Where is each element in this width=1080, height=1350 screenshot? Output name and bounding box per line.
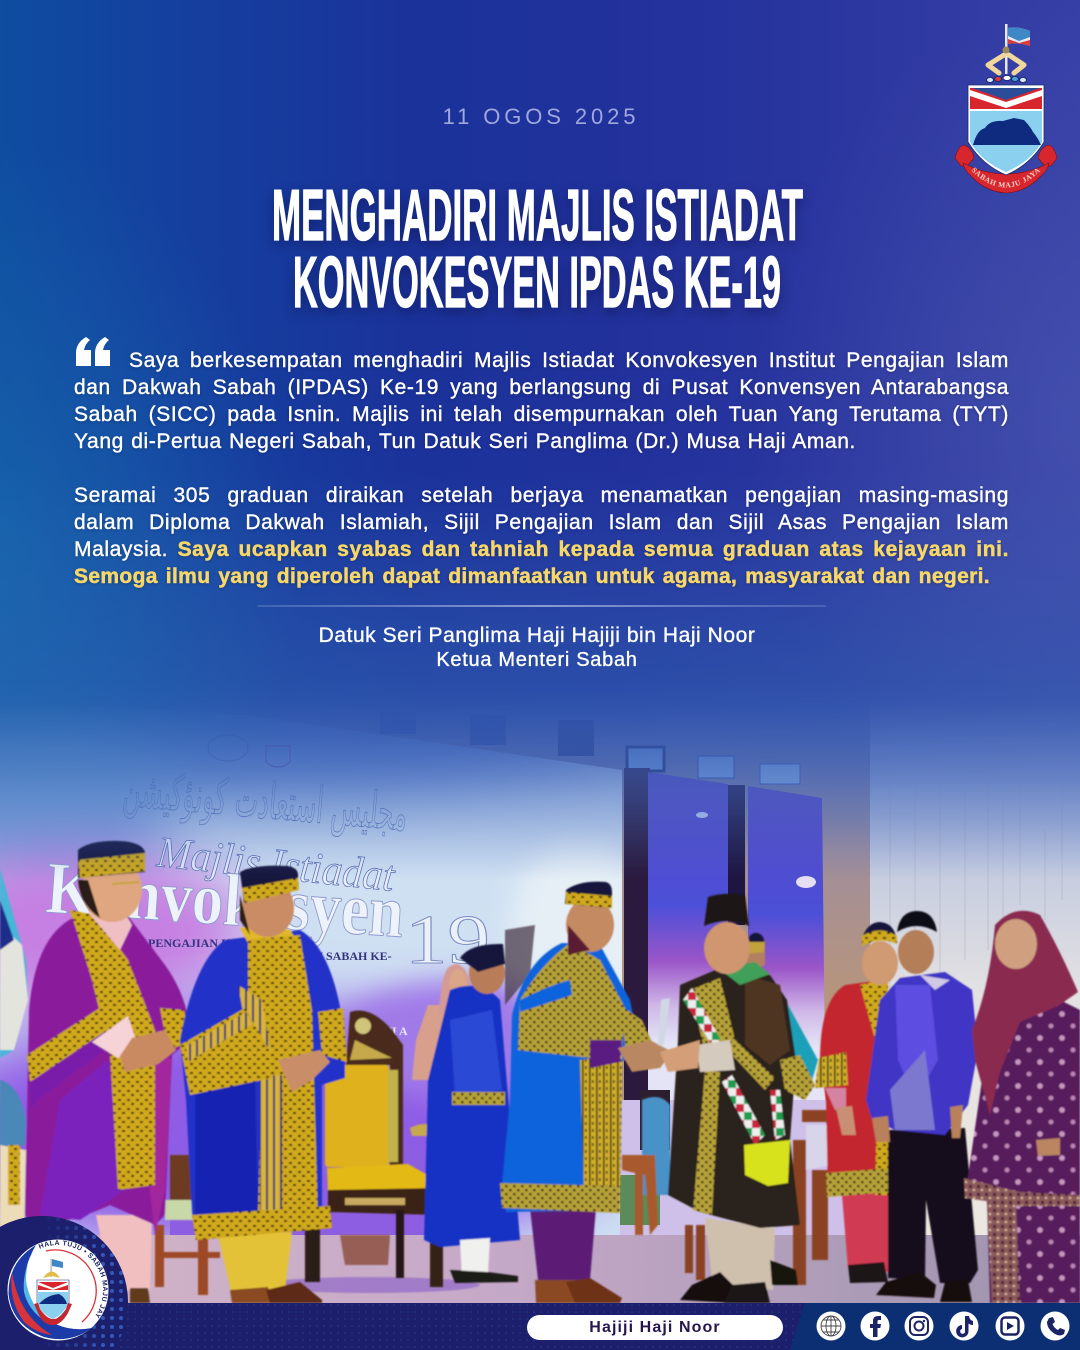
stage backdrop screen [0, 732, 622, 1235]
stage wall [378, 734, 870, 1100]
backdrop big title: Konvokesyen [44, 847, 407, 954]
quote text block: dalam Diploma Dakwah Islamiah, Sijil Pengajian Islam dan Sijil Asas Pengajian Islam [74, 511, 1009, 534]
icon: globe [816, 1312, 846, 1340]
icon: instagram [904, 1312, 934, 1340]
footer bar [114, 1303, 1080, 1350]
right slatted wall [870, 700, 1080, 1240]
stage backdrop screen: HAJI A [368, 1024, 408, 1038]
quote text block: Malaysia. Saya ucapkan syabas dan tahniah kepada semua graduan atas kejayaan ini. [74, 538, 1009, 561]
badge swoosh [8, 1245, 92, 1339]
flag [1005, 24, 1030, 74]
person 3: blue graduate from behind [424, 944, 520, 1283]
attribution: Ketua Menteri Sabah [436, 649, 638, 671]
attribution [319, 624, 755, 671]
badge: Hala Tuju Sabah Maju Jaya [0, 1216, 128, 1348]
crest: Sabah coat of arms [954, 24, 1058, 194]
guest in pink hijab [412, 964, 470, 1080]
quote text block: Semoga ilmu yang diperoleh dapat dimanfaatkan untuk agama, masyarakat dan negeri. [74, 565, 990, 588]
quote text block [74, 349, 1009, 590]
attribution: Datuk Seri Panglima Haji Hajiji bin Haji Noor [319, 624, 755, 647]
quote text block: Sabah (SICC) pada Isnin. Majlis ini telah disempurnakan oleh Tuan Yang Terutama (TYT) [74, 403, 1009, 426]
backdrop sub line: PENGAJIAN ISLAM [148, 936, 260, 950]
stage lights [470, 728, 800, 784]
photo: convocation ceremony on stage [0, 719, 1080, 1303]
icon: facebook [860, 1312, 890, 1340]
stage floor [96, 1235, 1080, 1303]
social pill: Hajiji Haji Noor [527, 1315, 783, 1340]
person 8: woman in maroon hijab [964, 911, 1080, 1303]
stage backdrop screen: AH SABAH KE- [305, 949, 392, 963]
icon: youtube play [996, 1312, 1024, 1340]
quote text block: Seramai 305 graduan diraikan setelah berjaya menamatkan pengajian masing-masing [74, 484, 1009, 507]
person 7: batik shirt [866, 911, 978, 1302]
wooden chairs behind graduates [685, 1110, 830, 1285]
small chair behind [155, 1155, 220, 1295]
dark columns [624, 768, 745, 1100]
ribbon motto: SABAH MAJU JAYA [972, 168, 1040, 188]
person 4: guest of honour [500, 882, 672, 1303]
date: 11 OGOS 2025 [443, 104, 639, 129]
quote text block: dan Dakwah Sabah (IPDAS) Ke-19 yang berlangsung di Pusat Konvensyen Antarabangsa [74, 376, 1009, 399]
person 6: red gown [815, 922, 908, 1283]
icon: phone [1040, 1312, 1070, 1340]
badge crest [34, 1259, 72, 1325]
quote text block: Saya berkesempatan menghadiri Majlis Istiadat Konvokesyen Institut Pengajian Islam [129, 349, 1009, 372]
stage backdrop screen: مجليس استعادت كونؤكيشن [121, 760, 410, 842]
left flag and seated guest [0, 868, 28, 1240]
backdrop emblems [208, 742, 290, 768]
person 5: graduate [658, 894, 818, 1303]
shield [968, 85, 1044, 175]
backdrop number: 19 [405, 902, 490, 979]
LED panels [648, 772, 826, 1100]
hanging trophy backdrop [505, 925, 535, 1005]
icon: tiktok [950, 1312, 978, 1340]
social pill: Hajiji Haji Noor: Hajiji Haji Noor [589, 1319, 721, 1336]
person 1: purple gown [25, 841, 190, 1303]
ribbon [955, 145, 1057, 193]
person 2: blue gown [180, 866, 347, 1303]
quote text block: Yang di-Pertua Negeri Sabah, Tun Datuk Seri Panglima (Dr.) Musa Haji Aman. [74, 430, 856, 453]
arms [988, 55, 1024, 73]
backdrop script title: Majlis Istiadat [154, 827, 398, 901]
background guest behind graduate [746, 932, 766, 968]
icon: quote mark [76, 337, 110, 366]
social icons [816, 1312, 1070, 1340]
seated guest behind [622, 1097, 670, 1235]
beads [986, 75, 1026, 83]
ceremonial chair [305, 1010, 443, 1287]
title [269, 176, 806, 320]
